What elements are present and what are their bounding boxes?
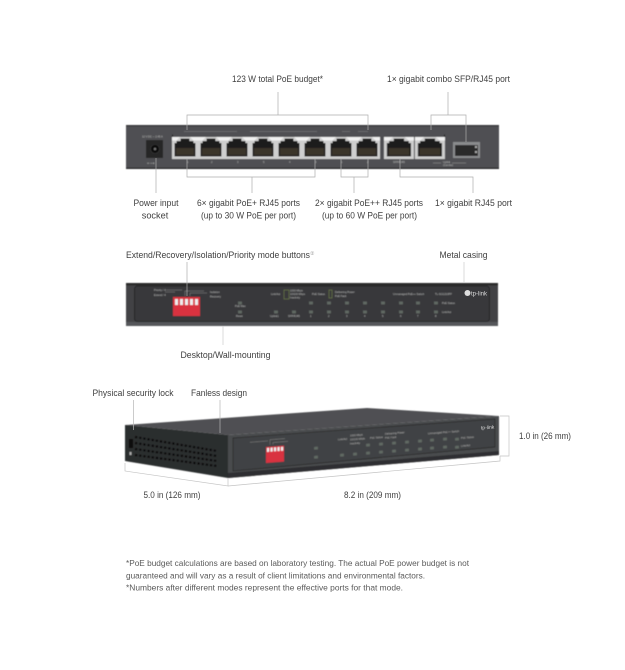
label: power socket second line: socket — [142, 210, 169, 220]
device: front view — [126, 283, 498, 326]
device: perspective view: PoE Fault — [385, 435, 397, 440]
device: rear view: 2 — [211, 160, 213, 164]
lock slot — [129, 439, 133, 448]
device: front view: 6 — [400, 314, 402, 318]
SFP slot — [453, 142, 480, 158]
left side face — [125, 425, 228, 478]
label: depth: 5.0 in (126 mm) — [144, 490, 200, 500]
callout lines: rear view — [156, 92, 473, 193]
logo: tp-link perspective: tp-link — [481, 425, 495, 431]
device: front view: 10/100 Mbps — [290, 292, 306, 296]
label: PoE+ wattage: (up to 30 W PoE per port) — [201, 210, 296, 220]
device: front view: Link/Act — [271, 292, 281, 296]
vents — [135, 437, 217, 466]
footnote: modes: *Numbers after different modes represent the effective ports for that mode. — [126, 582, 403, 592]
device: rear view: 2 — [367, 160, 369, 164]
device: rear view: 3 — [237, 160, 239, 164]
device: front view: Extend / 4 — [154, 293, 166, 297]
label: gigabit port: 1× gigabit RJ45 port — [435, 198, 512, 208]
dimension and callout lines: perspective view — [125, 400, 509, 486]
DIP switch perspective — [266, 446, 284, 463]
device: perspective view — [125, 408, 499, 478]
label: fanless design: Fanless design — [191, 388, 247, 398]
device: front view: 1000 Mbps — [290, 288, 304, 292]
device: perspective view: Link/Act — [461, 443, 470, 448]
device: front view: 4 — [364, 314, 366, 318]
front face — [228, 416, 499, 478]
device: front view: PoE Status — [442, 301, 456, 305]
DIP switch — [173, 297, 200, 316]
device: rear view: 12 V DC ⎓ 2.45 A — [142, 134, 163, 138]
device: front view: Recovery — [210, 294, 222, 298]
label: PoE+ ports: 6× gigabit PoE+ RJ45 ports — [197, 198, 300, 208]
device: perspective view: PoE Status — [370, 435, 384, 440]
device: front view: Priority / 4 — [154, 288, 166, 292]
label: height: 1.0 in (26 mm) — [519, 431, 571, 441]
device: rear view: 5 — [263, 160, 265, 164]
device: front view: Link/Act — [442, 310, 452, 314]
device: rear view — [126, 125, 499, 169]
icon: power socket — [146, 140, 163, 158]
device: rear view: 3 — [315, 160, 317, 164]
device: front view: 8 — [435, 314, 437, 318]
label: mode buttons: Extend/Recovery/Isolation/Priority mode buttons — [126, 250, 310, 260]
device: front view: Isolation — [210, 290, 220, 294]
device: perspective view: Inactivity — [350, 441, 361, 445]
footnote mark: ② — [310, 251, 315, 257]
device: perspective view: PoE Status — [461, 435, 475, 440]
device: front view: 1 — [310, 314, 312, 318]
label: PoE++ wattage: (up to 60 W PoE per port) — [322, 210, 417, 220]
device: front view: Uplink1 — [270, 314, 279, 318]
device: front view: Inactivity — [290, 296, 301, 300]
footnotes — [126, 558, 470, 592]
label: combo port: 1× gigabit combo SFP/RJ45 port — [387, 74, 510, 84]
device: perspective view: Delivering Power — [385, 430, 405, 436]
device: front view: SFP/RJ45 — [288, 314, 300, 318]
label: security lock: Physical security lock — [92, 388, 174, 398]
device: rear view: Uplink — [443, 160, 451, 164]
callout lines: front view — [187, 262, 464, 345]
logo mark — [464, 290, 470, 296]
label: total PoE budget: 123 W total PoE budget* — [232, 74, 323, 84]
device: perspective view: 1000 Mbps — [350, 432, 364, 437]
device: front view: 2 — [328, 314, 330, 318]
device: rear view: SFP/RJ45 — [393, 160, 405, 164]
label: width: 8.2 in (209 mm) — [344, 490, 401, 500]
device: front view: Unmanaged PoE++ Switch — [393, 292, 425, 296]
device: front view: 7 — [417, 314, 419, 318]
label: metal casing: Metal casing — [440, 250, 488, 260]
device: rear view: 1 — [341, 160, 343, 164]
device: rear view: ⊖-◑-⊕ — [147, 162, 155, 165]
footnote: PoE budget line 2: guaranteed and will vary as a result of client limitations and environmental factors. — [126, 570, 425, 580]
device: rear view: 1 — [187, 160, 189, 164]
device: rear view: 4 — [289, 160, 291, 164]
device: front view: 3 — [346, 314, 348, 318]
label: PoE++ ports: 2× gigabit PoE++ RJ45 ports — [315, 198, 423, 208]
top surface — [125, 408, 499, 435]
logo: tp-link: tp-link — [471, 292, 488, 298]
footnote: PoE budget line 1: *PoE budget calculations are based on laboratory testing. The actual PoE power budget is not — [126, 558, 470, 568]
device: front view: Reset — [236, 314, 243, 318]
device: front view: 5 — [382, 314, 384, 318]
device: rear view: (Combo) — [443, 163, 453, 167]
label: desktop wall mounting: Desktop/Wall-mounting — [180, 350, 270, 360]
device: front view: PoE Max — [235, 304, 246, 308]
label: power input socket: Power input — [134, 198, 179, 208]
device: perspective view: 10/100 Mbps — [350, 436, 366, 441]
device: front view: Delivering Power — [335, 290, 355, 294]
device: front view: PoE Status — [312, 292, 326, 296]
device: front view: PoE Fault — [335, 294, 347, 298]
device: front view: TL-SG1210PP — [435, 292, 452, 296]
device: perspective view: Link/Act — [338, 437, 347, 441]
device: perspective view: Unmanaged PoE++ Switch — [428, 429, 460, 435]
